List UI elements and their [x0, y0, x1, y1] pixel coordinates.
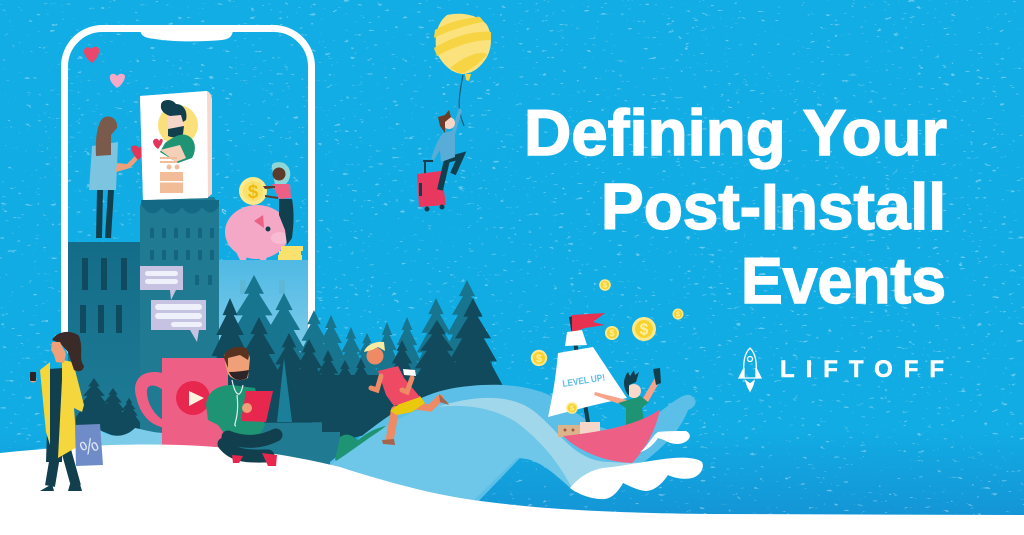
- shopping bag: %: [77, 433, 102, 461]
- shorts: [390, 396, 425, 415]
- background pine trees (teal): [223, 275, 492, 402]
- white foam: [570, 431, 703, 499]
- legs: [390, 398, 440, 438]
- title: [524, 96, 947, 317]
- earphones: [232, 380, 243, 426]
- speech bubbles: [140, 266, 206, 342]
- shoes: [232, 453, 277, 466]
- title: Events: [741, 244, 946, 317]
- sailing ship: [548, 313, 661, 463]
- head: [366, 348, 384, 364]
- crossed legs: [224, 435, 276, 456]
- title: Post-Install: [601, 170, 946, 243]
- main sail: LEVEL UP!: [562, 372, 606, 390]
- deck cargo: [558, 422, 600, 437]
- balloon traveller: [417, 14, 491, 212]
- running man: [364, 342, 449, 445]
- balloon: [434, 14, 491, 81]
- shirt: [206, 385, 265, 444]
- white ground: [0, 444, 1024, 535]
- shopping bag: [75, 424, 103, 466]
- mug with play button: [135, 358, 228, 448]
- floating hearts: [84, 47, 125, 88]
- mid wave: [330, 402, 605, 501]
- dress: [46, 368, 63, 462]
- gold stack: [278, 246, 303, 260]
- icon: rocket: [739, 348, 761, 391]
- head: [224, 349, 250, 380]
- hull: [563, 409, 660, 463]
- tablet: [241, 391, 273, 422]
- man with tablet: [206, 347, 277, 466]
- title: Defining Your: [524, 96, 947, 169]
- yellow coat: [40, 362, 50, 445]
- woman with shopping bag: [30, 332, 103, 491]
- woman giving heart: [89, 117, 146, 238]
- foreground pine trees (dark): [76, 298, 505, 445]
- light wave band: [438, 398, 650, 490]
- coin and woman saving: $: [248, 182, 259, 203]
- small sail: [565, 330, 587, 346]
- main sail: [548, 347, 627, 417]
- mast and flag: [569, 313, 605, 423]
- traveller: [431, 108, 462, 190]
- profile card: [140, 91, 212, 200]
- green hill: [335, 426, 386, 462]
- arms: [371, 376, 412, 392]
- balloon string: [459, 75, 464, 126]
- hair and face: [52, 332, 84, 371]
- phone hand: [30, 372, 36, 382]
- snow strip: [95, 428, 165, 450]
- sailor: [594, 368, 661, 430]
- torso: [378, 366, 420, 406]
- legs: [50, 450, 76, 486]
- buildings: [68, 197, 349, 475]
- Liftoff logo: [739, 348, 944, 391]
- phone frame: [64, 28, 312, 368]
- wordmark: LIFTOFF: [780, 356, 944, 383]
- suitcase: [417, 160, 446, 212]
- piggy bank: [222, 205, 289, 260]
- gold coins: [531, 279, 684, 414]
- coin and woman saving: [239, 162, 294, 245]
- outer wave: [330, 385, 696, 510]
